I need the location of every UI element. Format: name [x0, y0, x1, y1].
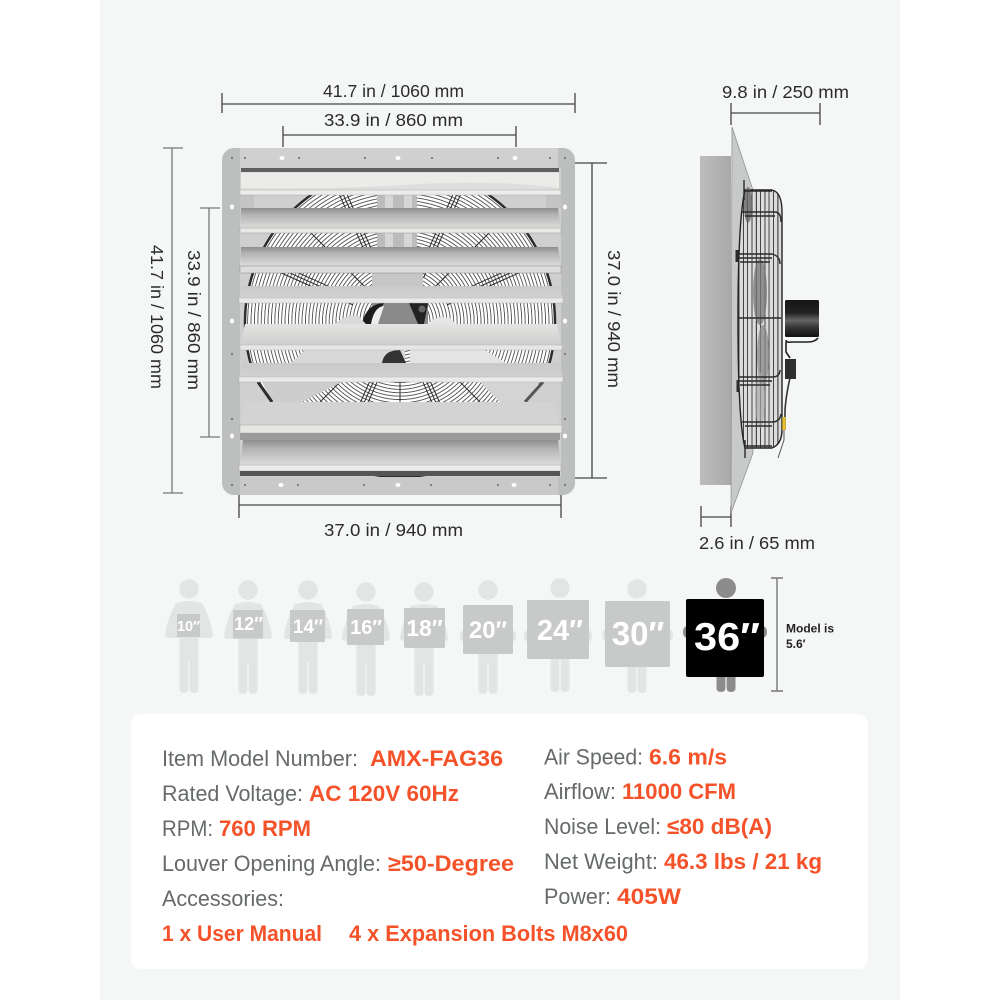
model height scale — [771, 578, 834, 691]
fan side view — [700, 127, 819, 513]
spec: power — [544, 884, 681, 909]
size comparison figures: 30″ — [612, 615, 664, 652]
power cord — [778, 338, 818, 458]
dimension: overall width: 41.7 in / 1060 mm — [323, 81, 464, 101]
dimension: shutter depth — [699, 506, 815, 553]
wall plate — [731, 127, 753, 513]
louver 7 — [240, 402, 562, 433]
spec: power: 405W — [617, 884, 681, 909]
size comparison figures: 16″ — [350, 617, 382, 639]
spec: item model number — [162, 746, 503, 771]
louver 3 — [240, 247, 561, 273]
dimension: mounting width — [283, 110, 516, 147]
cage bands — [737, 180, 781, 458]
figure 14 inch — [284, 580, 332, 694]
spec: net weight: Net Weight: — [544, 849, 658, 874]
dimension: mounting height: 33.9 in / 860 mm — [184, 250, 204, 390]
dimension: mounting width: 33.9 in / 860 mm — [324, 110, 463, 130]
dimension: mounting height — [184, 208, 220, 437]
size comparison figures: 12″ — [234, 614, 263, 634]
spec: airflow: 11000 CFM — [622, 779, 736, 804]
spec: noise level: ≤80 dB(A) — [667, 814, 772, 839]
dimension: opening height: 37.0 in / 940 mm — [604, 250, 624, 388]
fan opening — [240, 166, 561, 478]
figure 30 inch — [602, 579, 673, 693]
spec: rated voltage — [162, 781, 459, 806]
figure 24 inch — [524, 578, 592, 692]
dimension: side depth — [722, 82, 849, 125]
louver 8 — [239, 433, 561, 476]
dimension: opening height — [562, 163, 624, 478]
spec: item model number: AMX-FAG36 — [370, 746, 503, 771]
spec: item model number: Item Model Number: — [162, 746, 358, 771]
figure 20 inch — [460, 580, 516, 694]
spec: power: Power: — [544, 884, 611, 909]
spec: airflow — [544, 779, 736, 804]
spec: louver angle — [162, 851, 514, 876]
spec: rpm: RPM: — [162, 816, 213, 841]
size comparison figures: 24″ — [537, 615, 583, 647]
louver 1 — [240, 168, 561, 195]
accessories list: 4 x Expansion Bolts M8x60 — [349, 921, 628, 946]
dimension: overall height: 41.7 in / 1060 mm — [147, 245, 167, 389]
outer plate — [222, 148, 575, 495]
spec: rpm: 760 RPM — [219, 816, 311, 841]
dimension: opening width — [239, 475, 561, 540]
spec: accessories: Accessories: — [162, 886, 284, 911]
spec: louver angle: Louver Opening Angle: — [162, 851, 381, 876]
motor — [785, 300, 819, 337]
spec: air speed: 6.6 m/s — [649, 744, 727, 770]
spec: airflow: Airflow: — [544, 779, 616, 804]
size comparison figures: 36″ — [694, 616, 760, 659]
size comparison figures: 10″ — [177, 619, 200, 635]
model height scale: Model is — [786, 622, 834, 636]
specifications panel — [131, 714, 868, 969]
spec: noise level: Noise Level: — [544, 814, 661, 839]
spec: air speed: Air Speed: — [544, 744, 643, 770]
spec: net weight: 46.3 lbs / 21 kg — [664, 849, 822, 874]
top mounting strip — [240, 148, 558, 168]
figure 18 inch — [400, 582, 448, 696]
louver 4 — [239, 286, 563, 303]
spec: rated voltage: AC 120V 60Hz — [309, 781, 459, 806]
louver 6 — [239, 363, 563, 382]
figure 12 inch — [224, 580, 272, 694]
accessories list — [162, 921, 628, 946]
spec: net weight — [544, 849, 822, 874]
accessories list: 1 x User Manual — [162, 921, 322, 946]
fan front view — [222, 148, 575, 495]
junction box — [785, 359, 796, 379]
shutter box — [700, 156, 731, 485]
dimension: overall width — [222, 81, 575, 113]
spec: noise level — [544, 814, 772, 839]
size comparison figures: 18″ — [406, 615, 443, 641]
louver 2 — [240, 208, 561, 233]
dimension: overall height — [147, 148, 183, 493]
mounting holes — [230, 156, 567, 487]
dimension: side depth: 9.8 in / 250 mm — [722, 82, 849, 102]
dimension: opening width: 37.0 in / 940 mm — [324, 520, 463, 540]
size comparison figures — [165, 578, 767, 696]
size comparison figures: 20″ — [469, 617, 508, 644]
background panel — [100, 0, 900, 1000]
model height scale: 5.6′ — [786, 637, 806, 651]
fan blades — [753, 259, 767, 325]
spec: air speed — [544, 744, 727, 770]
spec: louver angle: ≥50-Degree — [388, 851, 514, 876]
size comparison figures: 14″ — [293, 617, 323, 638]
bottom mounting strip — [240, 477, 558, 495]
louver 5 — [240, 324, 562, 350]
spec: rpm — [162, 816, 311, 841]
figure 36 inch highlighted — [683, 578, 767, 692]
figure 16 inch — [342, 582, 390, 696]
dimension: shutter depth: 2.6 in / 65 mm — [699, 533, 815, 553]
spec: rated voltage: Rated Voltage: — [162, 781, 303, 806]
motor cage — [738, 190, 782, 448]
figure 10 inch — [165, 579, 213, 693]
